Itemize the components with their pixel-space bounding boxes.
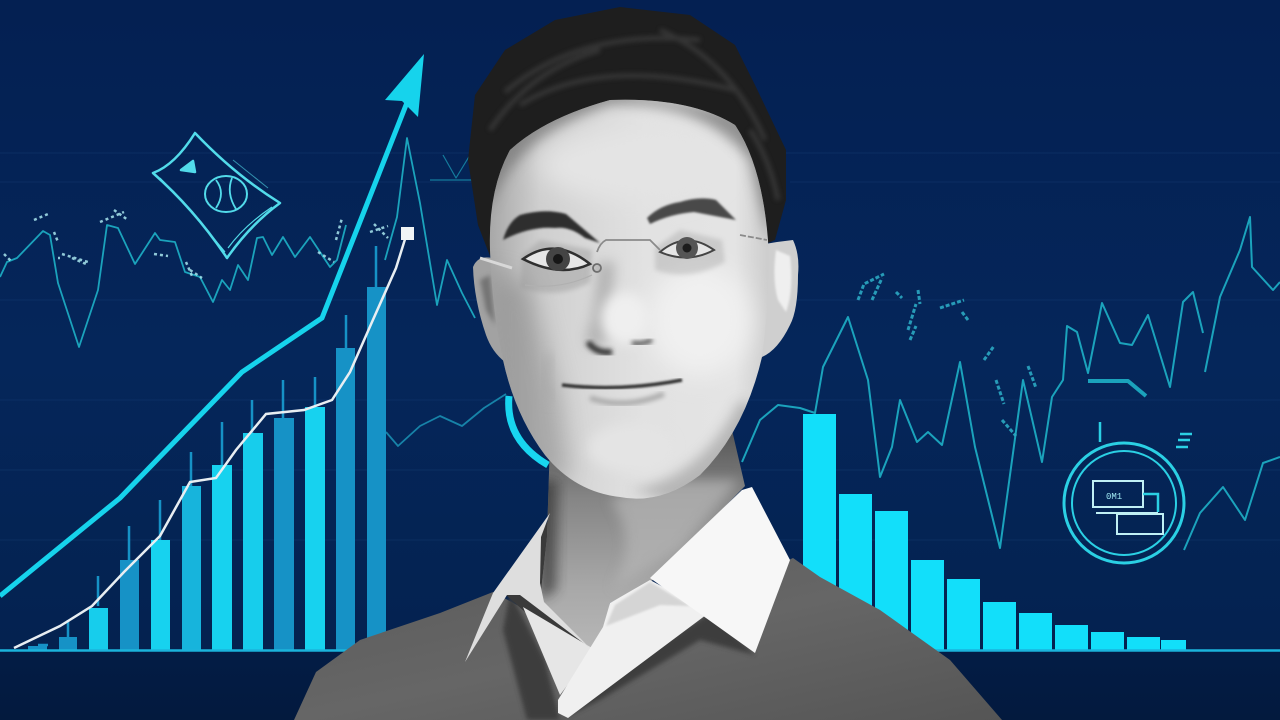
icon: circular badge sketch (1064, 422, 1192, 563)
chin highlight (592, 436, 612, 460)
hair (468, 7, 786, 256)
chart baseline (0, 649, 1280, 652)
collar gap fill (505, 520, 600, 650)
eye right (655, 230, 725, 274)
jaw shade (636, 398, 748, 498)
glasses (480, 235, 767, 286)
left bar chart (28, 246, 386, 650)
collar left (465, 513, 590, 662)
portrait (294, 7, 1002, 720)
left cheek shade (488, 270, 570, 480)
nose (586, 262, 652, 352)
placket (558, 580, 710, 718)
eyebrow right (647, 198, 736, 224)
right cheek highlight (654, 271, 758, 370)
big growth arrow (0, 54, 424, 596)
eyebrow left (503, 211, 600, 243)
shirt inner (523, 607, 592, 695)
icon: circular badge sketch: 0M1 (1106, 492, 1122, 502)
left ear (473, 257, 505, 362)
forehead highlight (541, 138, 612, 192)
collar right (650, 487, 790, 653)
mouth (544, 355, 682, 403)
sketch doodles left (4, 210, 388, 278)
hairline shadow (493, 100, 767, 235)
icon: tilted card sketch (153, 133, 280, 258)
left waveform line (0, 138, 506, 446)
right ear (762, 240, 798, 357)
sketch doodles right (858, 274, 1036, 436)
eye left (520, 240, 592, 293)
sweater (294, 558, 1002, 720)
face (490, 100, 768, 499)
cyan ring accent behind portrait (509, 396, 548, 465)
neck (541, 432, 745, 647)
right bar chart (803, 414, 1186, 650)
white trend line (14, 227, 414, 648)
sweater V neck shadow (503, 592, 755, 720)
right waveform line (742, 217, 1280, 550)
